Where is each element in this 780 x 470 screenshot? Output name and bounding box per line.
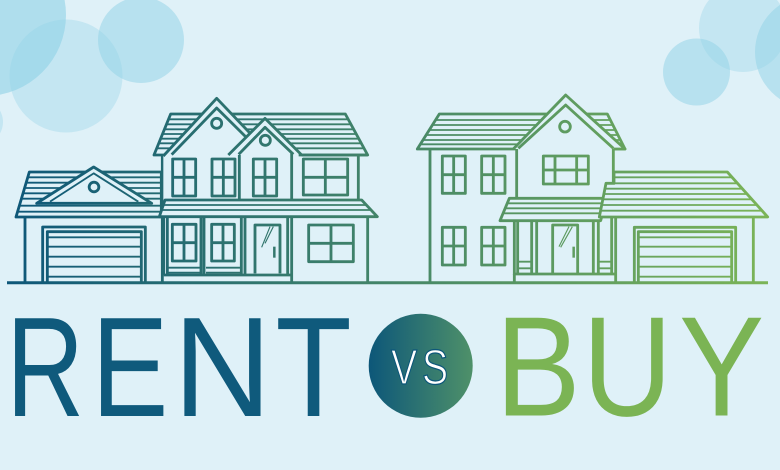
garage roof	[599, 172, 768, 217]
decorative bubbles: top right	[663, 0, 780, 109]
gable right with round window	[228, 118, 368, 201]
heading: BUY: B	[495, 287, 581, 446]
heading: RENT	[6, 288, 352, 447]
main roof	[417, 114, 625, 149]
garage wall and door	[25, 217, 145, 283]
front gable	[513, 95, 625, 200]
garage roof	[16, 167, 161, 217]
walls	[426, 149, 434, 283]
heading: RENT: T	[275, 289, 352, 447]
porch roof	[159, 200, 377, 217]
decorative bubbles: top left	[0, 0, 184, 145]
heading: RENT: N	[173, 288, 272, 447]
upper windows	[173, 159, 348, 196]
porch columns and door	[514, 217, 616, 283]
house: rent (left)	[16, 98, 377, 283]
porch roof	[500, 198, 607, 221]
gable left with round window	[163, 98, 253, 201]
heading: RENT: R	[6, 288, 84, 446]
garage wall and door	[634, 217, 753, 283]
heading: BUY: U	[582, 288, 672, 446]
vs badge	[369, 314, 473, 418]
upper and side windows	[442, 156, 588, 265]
main roof	[154, 114, 368, 155]
porch columns, windows and door	[164, 217, 353, 283]
heading: BUY: Y	[679, 287, 764, 446]
heading: RENT: E	[92, 289, 168, 447]
ground line	[7, 281, 768, 284]
house: buy (right)	[417, 95, 768, 283]
upper walls	[162, 155, 368, 283]
vs badge: VS	[391, 341, 453, 395]
heading: BUY	[495, 287, 764, 446]
